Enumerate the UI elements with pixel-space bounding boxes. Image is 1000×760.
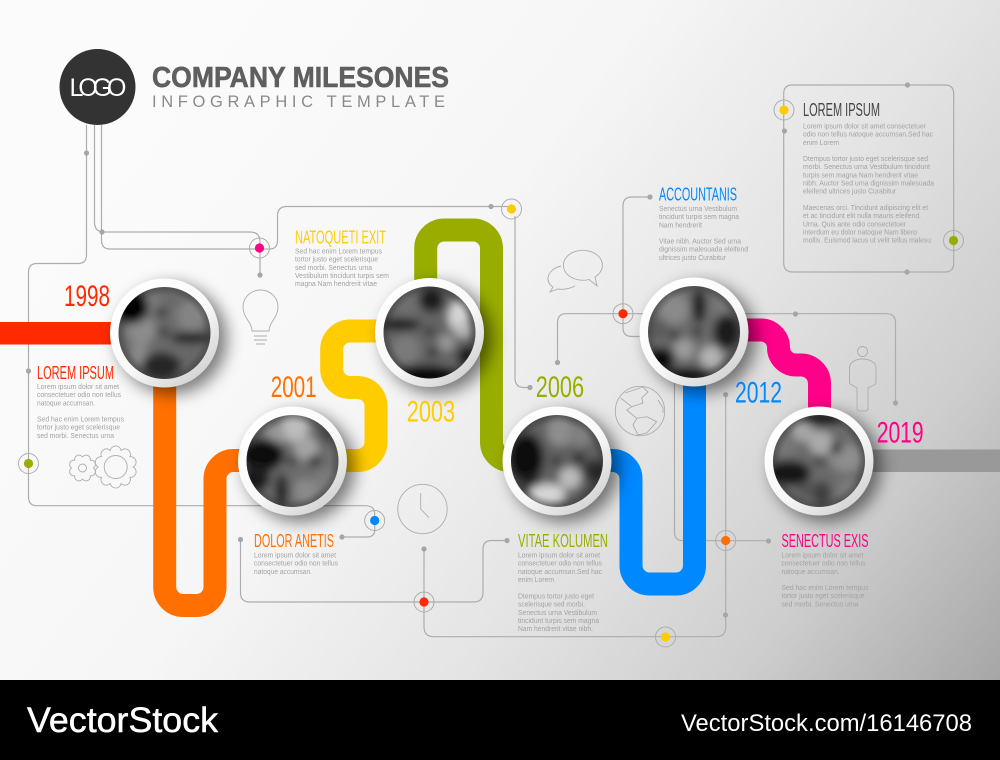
text block: vitae kolumen: consectetuer odio non tellus — [518, 559, 602, 568]
text block: senectus exis: tortor justo eget scelerisque — [782, 591, 864, 600]
text block: lorem ipsum box: enim Lorem — [803, 138, 839, 147]
text block: lorem ipsum left: consectetuer odio non tellus — [37, 390, 121, 399]
text block: vitae kolumen: Lorem ipsum dolor sit amet — [518, 550, 601, 560]
text block: lorem ipsum box: odio non tellus natoque accumsan.Sed hac — [803, 130, 933, 139]
text block: lorem ipsum left: Lorem ipsum dolor sit amet — [37, 382, 120, 391]
photo 1998 — [104, 273, 227, 394]
text block: accountanis: Nam hendrerit — [659, 220, 703, 229]
text block: lorem ipsum box: et ac tincidunt elit nulla mauris eleifend. — [803, 211, 921, 220]
text block: accountanis: Vitae nibh. Auctor Sed urna — [659, 236, 742, 246]
text block: vitae kolumen — [518, 530, 608, 633]
node: red bottom — [414, 592, 434, 612]
text block: lorem ipsum box: morbi. Senectus urna Vestibulum tincidunt — [803, 162, 931, 171]
year 2003: 2003 — [407, 396, 455, 428]
footer bar: VectorStock.com/16146708 — [681, 710, 972, 737]
text block: natoqueti exit: Sed hac enim Lorem tempus — [295, 246, 382, 256]
text block: lorem ipsum left: LOREM IPSUM — [37, 362, 114, 383]
connector lines — [28, 85, 954, 637]
text block: senectus exis — [782, 530, 869, 608]
text block: dolor anetis — [254, 530, 338, 576]
year 2012: 2012 — [735, 377, 782, 410]
timeline band: pink — [740, 330, 820, 415]
text block: dolor anetis: consectetuer odio non tellus — [254, 559, 338, 568]
text block: vitae kolumen: tincidunt turpis sem magna — [518, 616, 600, 625]
text block: lorem ipsum box: LOREM IPSUM — [803, 99, 880, 120]
subtitle: INFOGRAPHIC TEMPLATE — [152, 93, 445, 111]
photo 2001 — [232, 401, 355, 522]
text block: lorem ipsum box: Lorem ipsum dolor sit amet consectetuer — [803, 122, 926, 130]
text block: lorem ipsum box: turpis sem magna Nam hendrerit vitae — [803, 170, 918, 179]
text block: senectus exis: natoque accumsan. — [782, 567, 840, 576]
text block: lorem ipsum box: mollis. Euismod lacus ut velit tellus malesu — [803, 236, 931, 245]
title: COMPANY MILESONES — [152, 62, 449, 94]
text block: accountanis: tincidunt turpis sem magna — [659, 212, 740, 221]
text block: lorem ipsum left — [37, 362, 124, 440]
year 1998: 1998 — [64, 280, 110, 313]
text block: senectus exis: SENECTUS EXIS — [782, 530, 868, 551]
text block: vitae kolumen: Dtempus tortor justo eget — [518, 592, 595, 600]
text block: lorem ipsum box: eleifend ultrices justo Curabitur — [803, 187, 896, 196]
logo badge — [60, 49, 136, 125]
photo 2019 — [759, 401, 882, 522]
text block: lorem ipsum box: interdum eu dolor natoque Nam libero — [803, 228, 917, 236]
text block: senectus exis: Sed hac enim Lorem tempus — [782, 583, 869, 592]
text block: natoqueti exit: magna Nam hendrerit vitae — [295, 279, 377, 288]
text block: lorem ipsum left: natoque accumsan. — [37, 398, 95, 407]
photo 2006 — [497, 401, 620, 522]
icon: speech bubbles — [548, 250, 602, 292]
node: blue — [365, 510, 385, 530]
node: olive left — [18, 454, 38, 474]
text block: accountanis — [659, 184, 748, 262]
node: yellow bottom — [656, 627, 676, 647]
text block: accountanis: dignissim malesuada eleifend — [659, 245, 748, 254]
timeline band: yellow — [332, 331, 385, 460]
text block: lorem ipsum box: Dtempus tortor justo eget scelerisque sed — [803, 154, 928, 163]
text block: vitae kolumen: VITAE KOLUMEN — [518, 530, 608, 551]
text block: accountanis: ultrices justo Curabitur — [659, 253, 726, 262]
text block: vitae kolumen: Senectus urna Vestibulum — [518, 608, 597, 617]
year 2001: 2001 — [271, 371, 317, 404]
node: yellow top — [502, 199, 522, 219]
photo 2003 — [370, 272, 492, 394]
timeline band: grey — [868, 450, 1000, 472]
timeline band: red — [0, 322, 115, 344]
text block: lorem ipsum left: sed morbi. Senectus urna — [37, 431, 115, 440]
text block: accountanis: ACCOUNTANIS — [659, 184, 737, 204]
text block: natoqueti exit: NATOQUETI EXIT — [295, 226, 386, 248]
footer bar: VectorStock — [27, 701, 219, 740]
timeline band: olive — [426, 230, 520, 460]
icon: person — [850, 346, 876, 411]
footer bar — [0, 680, 1000, 760]
icon: gears — [70, 446, 136, 488]
icon: light bulb — [243, 290, 278, 344]
text block: dolor anetis: Lorem ipsum dolor sit amet — [254, 550, 337, 560]
node: olive box — [944, 230, 964, 250]
text block: senectus exis: consectetuer odio non tellus — [782, 559, 866, 568]
text block: natoqueti exit: Vestibulum tincidunt turpis sem — [295, 271, 389, 280]
text block: natoqueti exit: sed morbi. Senectus urna — [295, 263, 373, 272]
icon: globe — [615, 386, 665, 436]
text block: lorem ipsum left: Sed hac enim Lorem tempus — [37, 414, 124, 424]
text block: lorem ipsum box — [803, 99, 935, 245]
photo 2012 — [634, 272, 756, 393]
text block: natoqueti exit: tortor justo eget scelerisque — [295, 255, 378, 264]
text block: natoqueti exit — [295, 226, 389, 288]
text block: vitae kolumen: natoque accumsan.Sed hac — [518, 567, 602, 576]
text block: vitae kolumen: enim Lorem — [518, 575, 554, 584]
timeline band: orange — [165, 380, 250, 606]
text block: lorem ipsum left: tortor justo eget scelerisque — [37, 423, 120, 432]
text block: senectus exis: Lorem ipsum dolor sit amet — [782, 550, 864, 560]
text block: dolor anetis: natoque accumsan. — [254, 567, 312, 576]
icon: clock — [398, 484, 447, 534]
connector dots — [26, 82, 910, 618]
text block: lorem ipsum box: Maecenas orci. Tincidunt adipiscing elit et — [803, 203, 929, 212]
node: yellow box — [774, 100, 794, 120]
node: orange — [716, 530, 736, 550]
node: red accountanis — [613, 304, 633, 324]
year 2006: 2006 — [536, 371, 584, 404]
text block: accountanis: Senectus urna Vestibulum — [659, 204, 737, 213]
text block: lorem ipsum box: nibh. Auctor Sed urna dignissim malesuada — [803, 178, 935, 188]
text block: lorem ipsum box: Urna. Quis ante odio consectetuer — [803, 219, 906, 228]
year 2019: 2019 — [877, 416, 924, 449]
timeline band: blue — [600, 380, 694, 584]
text block: vitae kolumen: scelerisque sed morbi. — [518, 600, 585, 609]
text block: dolor anetis: DOLOR ANETIS — [254, 530, 334, 551]
text block: senectus exis: sed morbi. Senectus urna — [782, 599, 859, 608]
logo badge: LOGO — [70, 74, 126, 102]
text block: vitae kolumen: Nam hendrerit vitae nibh. — [518, 624, 593, 633]
node: pink — [250, 238, 270, 258]
